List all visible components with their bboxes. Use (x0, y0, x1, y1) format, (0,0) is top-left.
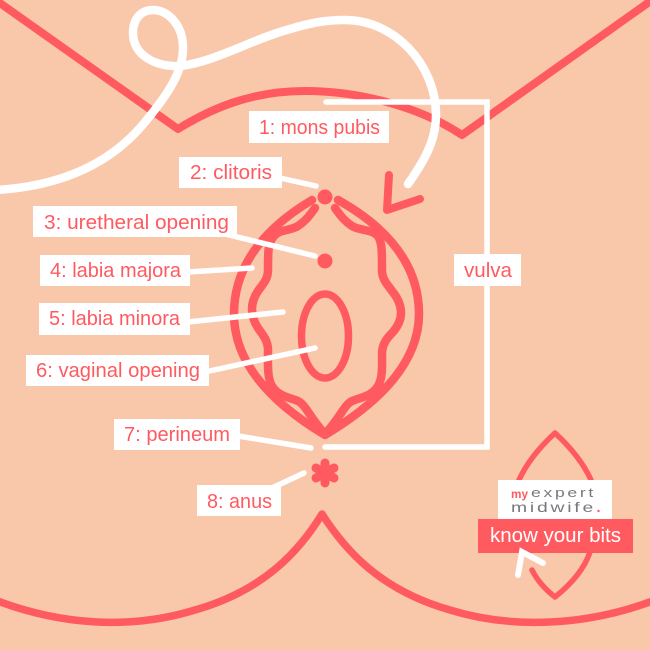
tagline banner (478, 519, 633, 553)
urethral opening (318, 254, 332, 268)
leader lines (188, 178, 316, 488)
logo text: expert: expert (531, 485, 596, 500)
label: clitoris (179, 157, 282, 188)
logo text: midwife: midwife (511, 499, 596, 515)
labia minora right (325, 208, 401, 434)
label: vaginal opening: 6: vaginal opening (36, 360, 200, 382)
label: labia minora: 5: labia minora (49, 308, 181, 330)
label: labia minora (39, 303, 190, 335)
labia minora left (252, 208, 325, 434)
body outline: buttocks (0, 514, 650, 622)
label: anus: 8: anus (207, 491, 272, 513)
label: perineum (114, 419, 240, 450)
labia majora (234, 200, 419, 435)
label: anus (197, 485, 281, 516)
label: perineum: 7: perineum (124, 424, 230, 446)
label: vaginal opening (26, 355, 209, 386)
clitoris (318, 190, 332, 204)
arrow head (387, 175, 420, 210)
label: vulva: vulva (464, 260, 513, 282)
logo leaf (519, 433, 591, 597)
logo text: my: my (511, 487, 528, 501)
vaginal opening (302, 294, 348, 378)
tagline banner: know your bits (490, 525, 621, 547)
logo (498, 480, 612, 519)
white arrow (518, 552, 543, 575)
body outline: hips and mons (0, 0, 650, 135)
label: urethral opening: 3: uretheral opening (44, 212, 229, 234)
vulva bracket (325, 102, 487, 447)
logo dot (597, 510, 600, 512)
label: urethral opening (33, 206, 237, 237)
swirl arrow line (0, 10, 436, 190)
label: mons pubis: 1: mons pubis (259, 117, 380, 139)
label: labia majora (40, 255, 190, 286)
label: vulva (454, 254, 521, 286)
label: labia majora: 4: labia majora (50, 260, 182, 282)
label: clitoris: 2: clitoris (190, 162, 272, 184)
vulva anatomy drawing (234, 200, 419, 435)
anus (316, 463, 334, 483)
label: mons pubis (249, 111, 389, 143)
